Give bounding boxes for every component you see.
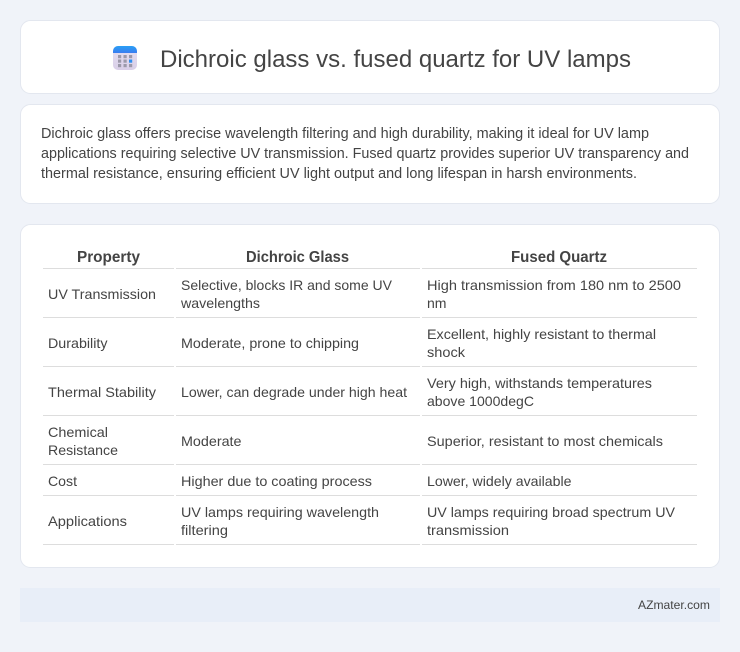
row: Thermal Stability: Lower, can degrade under high heat <box>181 384 407 400</box>
panel: summary <box>20 104 720 204</box>
table header: Fused Quartz <box>511 249 607 266</box>
row: Applications <box>48 504 676 538</box>
row: Applications: filtering <box>181 522 228 538</box>
row: UV Transmission: High transmission from 180 nm to 2500 <box>427 277 681 293</box>
row: UV Transmission: nm <box>427 295 446 311</box>
title: Dichroic glass vs. fused quartz for UV lamps <box>160 46 631 73</box>
row: Applications: Applications <box>48 513 127 529</box>
text block: summary paragraph <box>41 126 689 182</box>
table header: Property <box>77 249 140 266</box>
row: Durability: shock <box>427 344 466 360</box>
row: UV Transmission: Selective, blocks IR and some UV <box>181 277 393 293</box>
row: Chemical Resistance: Resistance <box>48 442 118 458</box>
row: Cost: Cost <box>48 473 77 489</box>
row: Thermal Stability: Very high, withstands temperatures <box>427 375 652 391</box>
row: Chemical Resistance: Moderate <box>181 433 242 449</box>
row: Applications: UV lamps requiring wavelength <box>181 504 379 520</box>
row: Durability <box>48 326 656 360</box>
icon: calendar <box>113 46 137 70</box>
row: Durability: Durability <box>48 335 108 351</box>
table header: Dichroic Glass <box>246 249 349 266</box>
row: Cost: Lower, widely available <box>427 473 572 489</box>
footer bar <box>20 588 720 622</box>
panel: title card <box>20 20 720 94</box>
row: UV Transmission <box>48 277 681 311</box>
row: UV Transmission: UV Transmission <box>48 286 156 302</box>
text block: summary paragraph: applications requiring selective UV transmission. Fused quartz provides superior UV transparency and <box>41 146 689 162</box>
table rules <box>43 268 697 545</box>
row: Applications: UV lamps requiring broad spectrum UV <box>427 504 676 520</box>
row: Thermal Stability: above 1000degC <box>427 393 534 409</box>
table header <box>77 249 607 266</box>
row: Chemical Resistance: Superior, resistant to most chemicals <box>427 433 663 449</box>
text block: summary paragraph: thermal resistance, ensuring efficient UV light output and long lifespan in harsh environments. <box>41 166 637 182</box>
row: Thermal Stability <box>48 375 652 409</box>
row: Cost: Higher due to coating process <box>181 473 372 489</box>
row: Applications: transmission <box>427 522 509 538</box>
row: Chemical Resistance: Chemical <box>48 424 108 440</box>
row: Thermal Stability: Thermal Stability <box>48 384 156 400</box>
row: Durability: Moderate, prone to chipping <box>181 335 359 351</box>
panel: comparison table <box>20 224 720 568</box>
footer credit: AZmater.com <box>638 598 710 612</box>
row: Chemical Resistance <box>48 424 663 458</box>
text block: summary paragraph: Dichroic glass offers precise wavelength filtering and high durability, making it ideal for UV lamp <box>41 126 649 142</box>
row: Durability: Excellent, highly resistant to thermal <box>427 326 656 342</box>
row: Cost <box>48 473 572 489</box>
row: UV Transmission: wavelengths <box>180 295 260 311</box>
